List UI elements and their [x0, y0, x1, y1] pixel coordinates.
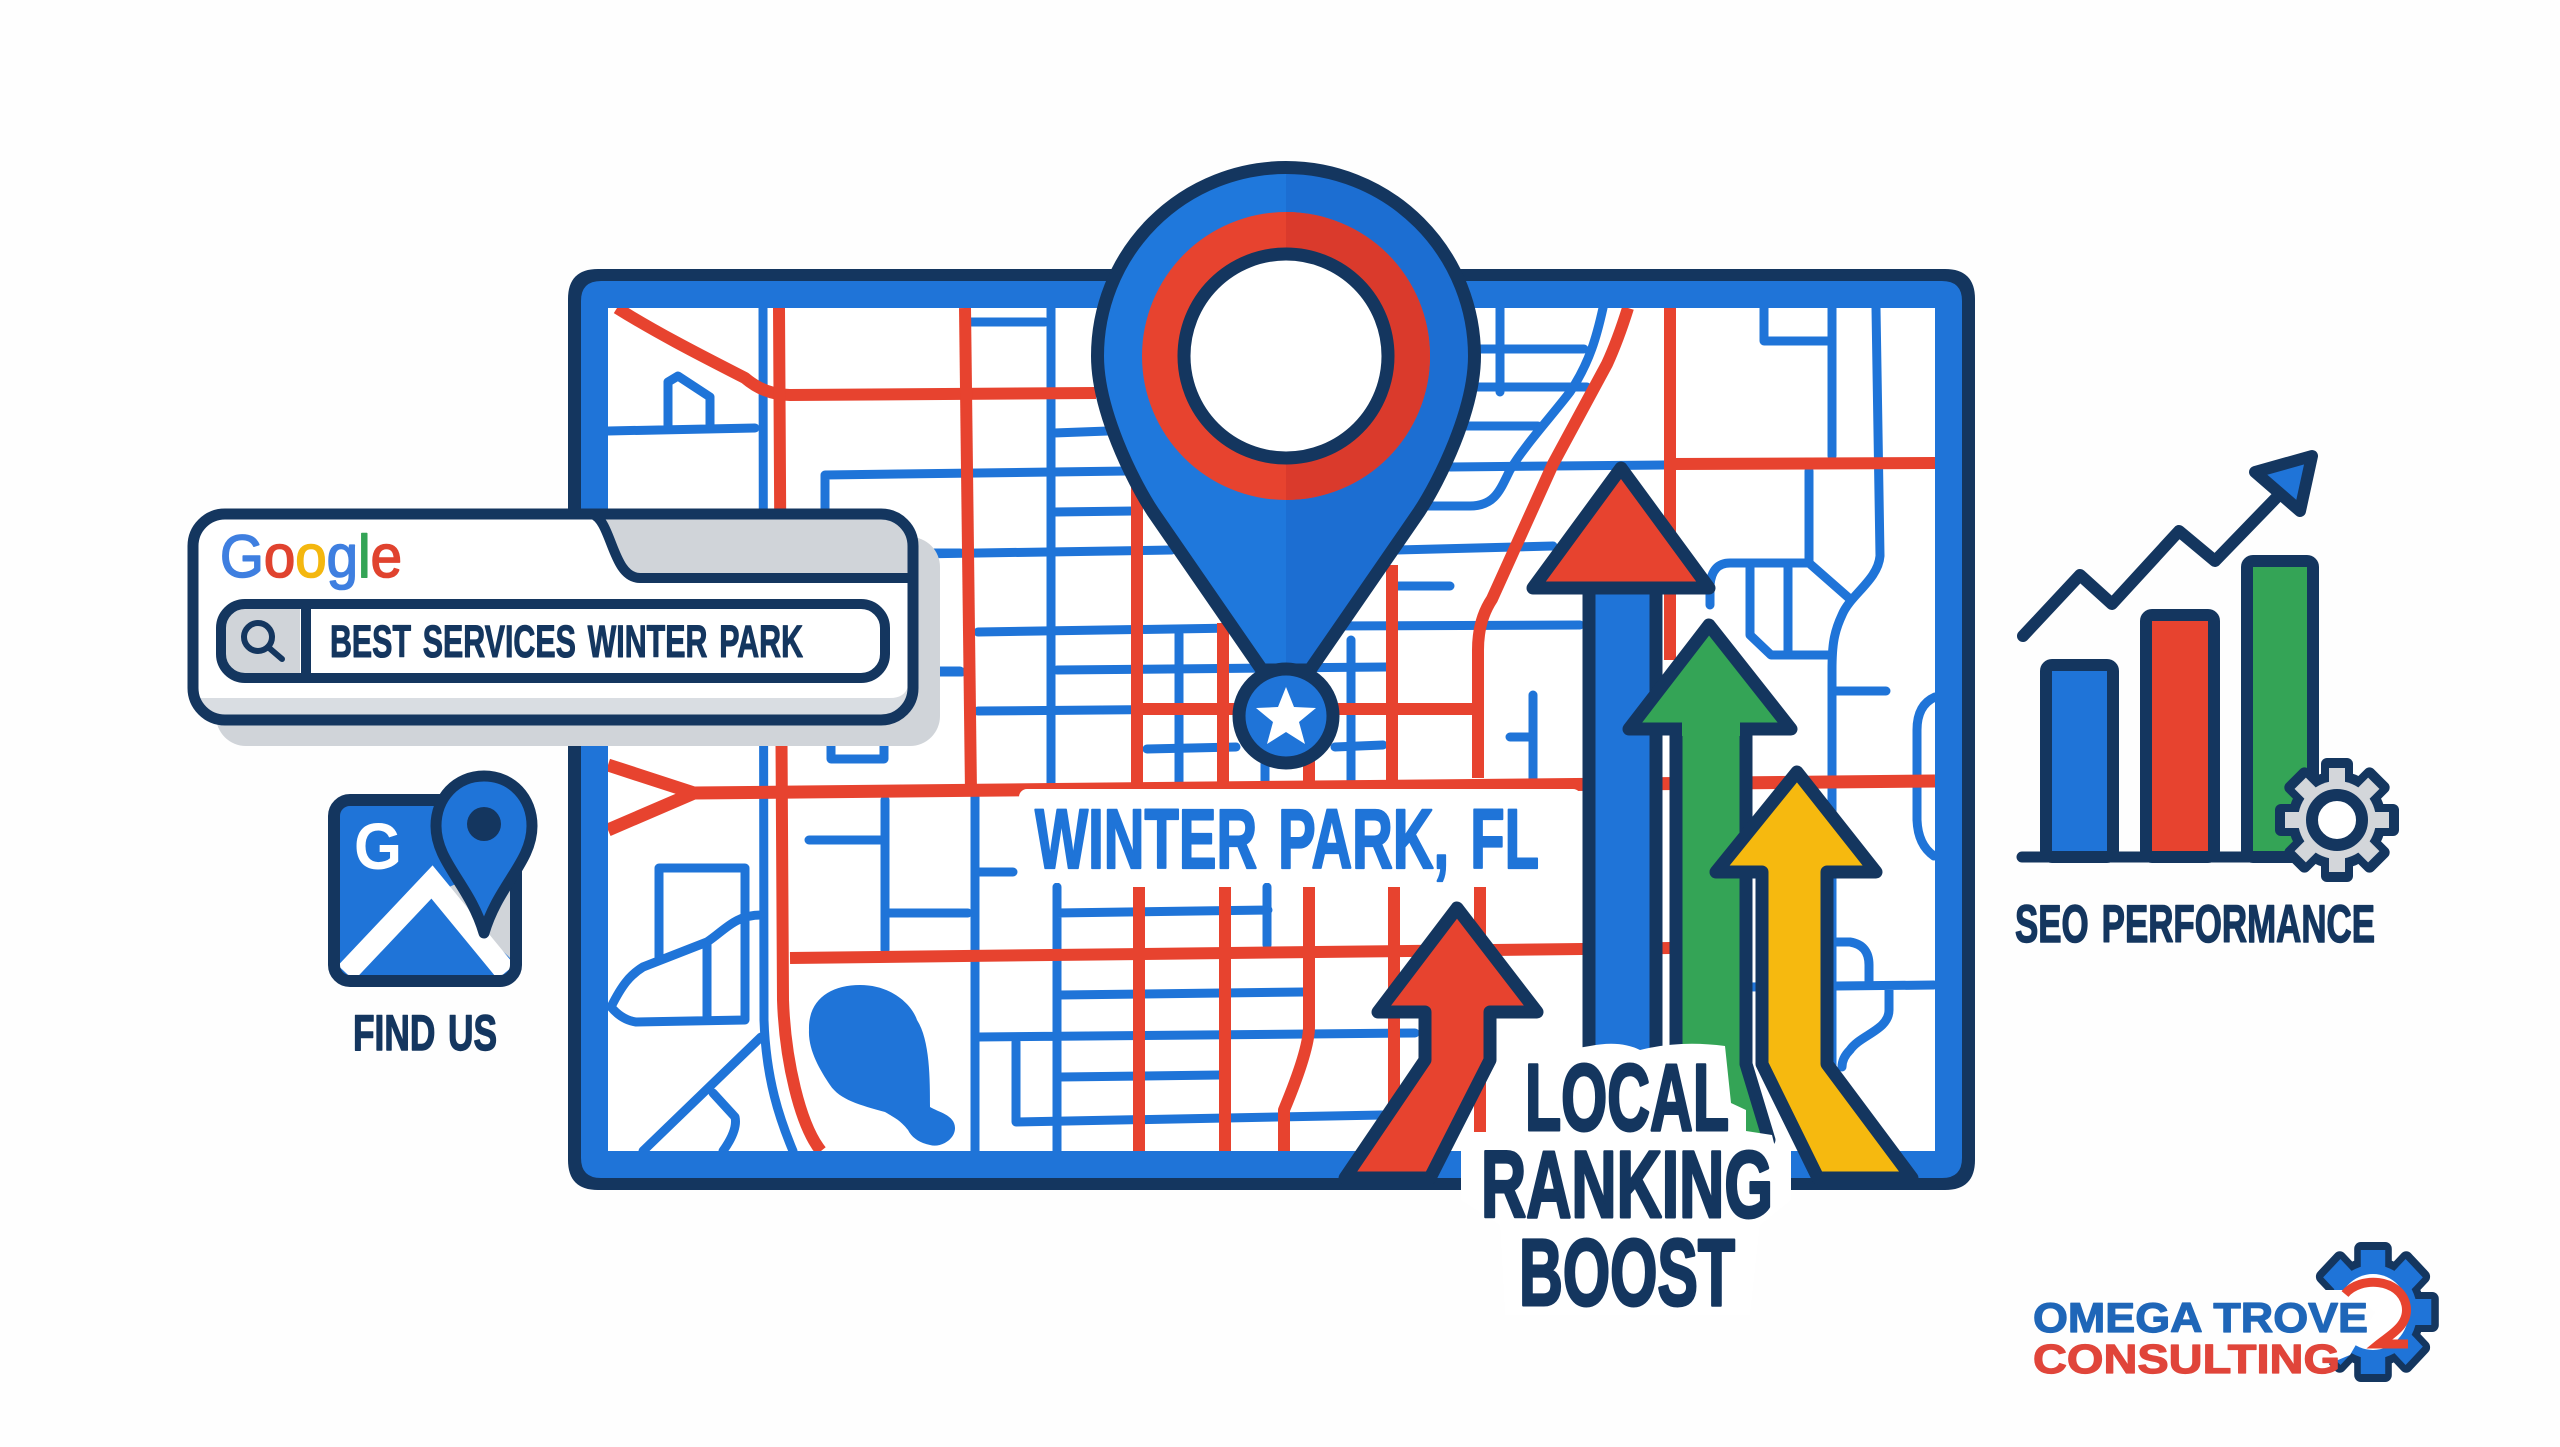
map frame	[568, 269, 1975, 1190]
label background	[1019, 789, 1581, 883]
red ring	[1142, 212, 1430, 500]
star badge	[1239, 669, 1333, 763]
bar blue	[2046, 665, 2113, 857]
Google wordmark: Google	[220, 523, 402, 590]
G letter: G	[354, 809, 402, 883]
card body	[193, 514, 913, 720]
find us label: FIND US	[353, 1005, 497, 1061]
card outline	[193, 514, 913, 720]
arrow: blue and red tall	[1533, 468, 1709, 1065]
card shadow	[216, 537, 940, 746]
icon: gear	[2275, 758, 2399, 882]
blue minor roads	[608, 308, 1935, 1151]
map white ground	[581, 281, 1962, 1178]
pin body left	[1098, 168, 1286, 670]
arrow: red short	[1345, 908, 1537, 1178]
arrow: yellow	[1716, 772, 1912, 1178]
BOOST: BOOST	[1519, 1220, 1735, 1326]
RANKING: RANKING	[1481, 1132, 1773, 1238]
bar green	[2247, 561, 2313, 857]
white road chevron	[346, 882, 506, 973]
OMEGA TROVE: OMEGA TROVE	[2033, 1294, 2368, 1341]
panel: city map	[568, 269, 1975, 1190]
chart: SEO performance	[2022, 456, 2399, 882]
LOCAL: LOCAL	[1525, 1045, 1729, 1151]
map pin	[436, 776, 532, 933]
trend arrow head	[2255, 456, 2312, 511]
grey map corner	[440, 860, 510, 958]
search query text: BEST SERVICES WINTER PARK	[330, 616, 803, 667]
main location pin	[1098, 168, 1474, 763]
red main roads	[608, 308, 1935, 1151]
axis	[2022, 852, 2300, 862]
omega mark	[2345, 1282, 2408, 1344]
tab outline	[592, 514, 913, 578]
CONSULTING: CONSULTING	[2033, 1336, 2340, 1382]
logo gear gap	[2290, 1290, 2375, 1380]
white centre	[1184, 254, 1388, 458]
lake	[809, 985, 955, 1146]
browser tab	[592, 514, 913, 578]
maps tile	[334, 800, 516, 981]
pin body right	[1286, 168, 1474, 670]
search card	[193, 514, 940, 746]
logo: Omega Trove Consulting	[2033, 1242, 2439, 1382]
trend line	[2023, 497, 2277, 636]
icon: maps app	[334, 776, 532, 981]
logo gear	[2307, 1242, 2439, 1382]
card bottom shade	[198, 686, 908, 715]
pin outline	[1098, 168, 1474, 670]
bar red	[2146, 615, 2214, 857]
search field	[221, 604, 885, 678]
city label	[1019, 789, 1581, 886]
local ranking boost	[1461, 1044, 1791, 1326]
text halo	[1461, 1044, 1791, 1315]
icon: magnifier	[244, 623, 282, 659]
red ring shaded half	[1286, 212, 1430, 500]
tile outline	[334, 800, 516, 981]
arrow: green	[1629, 625, 1791, 1140]
SEO performance label: SEO PERFORMANCE	[2015, 895, 2375, 954]
label text: WINTER PARK, FL	[1035, 792, 1539, 886]
